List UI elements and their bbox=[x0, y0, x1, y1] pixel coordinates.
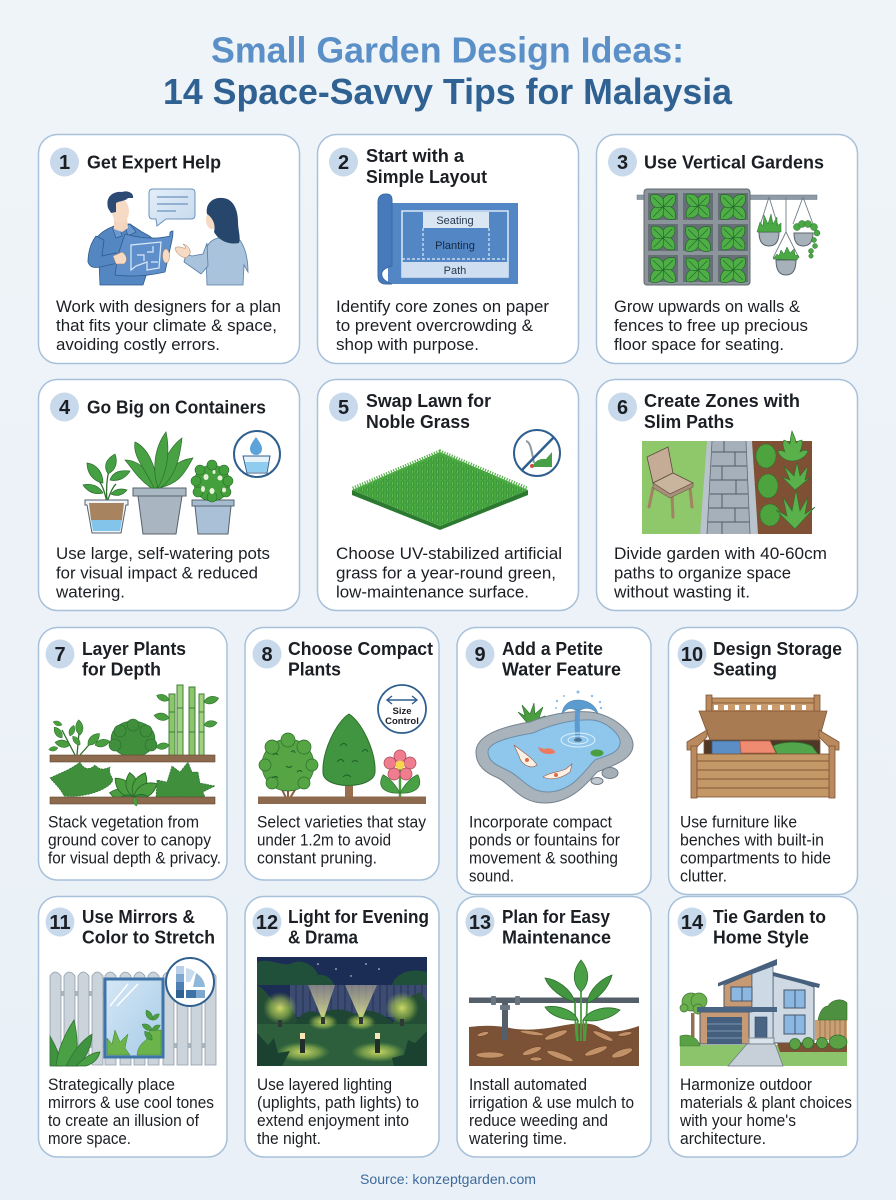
panel: tip 5 artificial grass bbox=[318, 380, 578, 610]
body text 11: Strategically place bbox=[48, 1076, 175, 1094]
body text 2: shop with purpose. bbox=[336, 336, 479, 354]
panel: tip 8 compact plants bbox=[245, 628, 439, 880]
heading 7: Layer Plants bbox=[82, 639, 186, 659]
body text 12: the night. bbox=[257, 1130, 321, 1148]
number badge 6: 6 bbox=[617, 397, 628, 419]
number badge 12 bbox=[252, 908, 282, 936]
body text 7 bbox=[48, 814, 221, 868]
illustration: rolled plan with zones: Path bbox=[444, 265, 466, 277]
body text 10: Use furniture like bbox=[680, 814, 797, 832]
illustration: artificial grass mat bbox=[352, 452, 528, 530]
heading 10: Seating bbox=[713, 660, 777, 680]
number badge 8: 8 bbox=[261, 644, 273, 666]
number badge 11 bbox=[46, 908, 74, 936]
source footer: Source: konzeptgarden.com bbox=[360, 1171, 536, 1187]
heading 14 bbox=[713, 907, 826, 948]
heading 2 bbox=[366, 146, 487, 187]
number badge 14: 14 bbox=[681, 912, 704, 934]
heading 4: Go Big on Containers bbox=[87, 398, 266, 418]
body text 14 bbox=[679, 1076, 852, 1148]
illustration: rolled plan with zones: Seating bbox=[436, 215, 474, 227]
heading 11 bbox=[82, 907, 215, 948]
body text 7: Stack vegetation from bbox=[48, 814, 199, 832]
heading 5: Noble Grass bbox=[366, 412, 470, 432]
panel: tip 14 home style bbox=[668, 896, 858, 1157]
body text 5 bbox=[336, 545, 562, 602]
heading 7: for Depth bbox=[82, 660, 161, 680]
body text 10: compartments to hide bbox=[680, 850, 831, 868]
panel: tip 11 mirrors and colour bbox=[38, 896, 227, 1157]
icon: no lawn mower bbox=[514, 430, 560, 476]
panel: tip 1 get expert help bbox=[38, 134, 300, 364]
number badge 7: 7 bbox=[54, 644, 66, 666]
body text 10: benches with built-in bbox=[680, 832, 824, 850]
icon: water-saving drop bbox=[234, 431, 280, 477]
illustration: rolled plan with zones bbox=[378, 194, 518, 284]
body text 11 bbox=[48, 1076, 214, 1148]
body text 9: movement & soothing bbox=[469, 850, 618, 868]
heading 3: Use Vertical Gardens bbox=[644, 152, 824, 172]
title: Small Garden Design Ideas: bbox=[211, 30, 684, 70]
body text 4: for visual impact & reduced bbox=[56, 564, 258, 582]
illustration: storage bench bbox=[687, 695, 839, 798]
body text 7: for visual depth & privacy. bbox=[48, 850, 221, 868]
body text 3: Grow upwards on walls & bbox=[614, 298, 800, 316]
body text 13: watering time. bbox=[468, 1130, 567, 1148]
icon: cool colour swatch bbox=[166, 958, 214, 1006]
illustration: layered plants on two tiers bbox=[48, 685, 220, 807]
panel: tip 4 containers bbox=[38, 380, 300, 610]
heading 11: Color to Stretch bbox=[82, 928, 215, 948]
panel: tip 7 layer plants bbox=[38, 628, 227, 880]
illustration: compact shrubs and flower bbox=[258, 685, 426, 804]
body text 5: grass for a year-round green, bbox=[336, 564, 556, 582]
number badge 14 bbox=[678, 908, 706, 936]
illustration: designer and client with blueprint bbox=[88, 189, 248, 285]
heading 6: Slim Paths bbox=[644, 412, 734, 432]
panel: tip 3 vertical gardens bbox=[596, 134, 858, 364]
heading 5 bbox=[366, 391, 491, 432]
heading 9: Water Feature bbox=[502, 660, 621, 680]
number badge 2: 2 bbox=[338, 152, 349, 174]
heading 2: Simple Layout bbox=[366, 167, 487, 187]
number badge 5 bbox=[329, 392, 358, 422]
heading 6 bbox=[644, 391, 800, 432]
heading 8: Plants bbox=[288, 660, 341, 680]
body text 1: avoiding costly errors. bbox=[56, 336, 220, 354]
heading 7 bbox=[82, 639, 186, 680]
illustration: koi pond with fountain bbox=[476, 690, 633, 803]
illustration: night garden lighting bbox=[257, 957, 427, 1066]
illustration: green wall and hanging pots bbox=[637, 189, 820, 286]
icon: size control: Size bbox=[392, 706, 412, 717]
heading 9: Add a Petite bbox=[502, 639, 603, 659]
body text 8: under 1.2m to avoid bbox=[257, 832, 391, 850]
panel: tip 6 zones and slim paths bbox=[596, 380, 858, 610]
body text 14: materials & plant choices bbox=[680, 1094, 852, 1112]
body text 10: clutter. bbox=[680, 868, 727, 886]
number badge 5: 5 bbox=[338, 397, 349, 419]
body text 11: mirrors & use cool tones bbox=[48, 1094, 214, 1112]
plant 1 leaves bbox=[83, 454, 130, 502]
body text 2: Identify core zones on paper bbox=[336, 298, 550, 316]
panel: tip 10 storage seating bbox=[668, 628, 858, 894]
body text 3: fences to free up precious bbox=[614, 317, 808, 335]
heading 6: Create Zones with bbox=[644, 391, 800, 411]
heading 9 bbox=[502, 639, 621, 680]
body text 13: reduce weeding and bbox=[469, 1112, 608, 1130]
body text 8: Select varieties that stay bbox=[257, 814, 427, 832]
heading 1: Get Expert Help bbox=[87, 152, 221, 172]
heading 14: Home Style bbox=[713, 928, 809, 948]
number badge 13 bbox=[466, 908, 494, 936]
heading 10: Design Storage bbox=[713, 639, 842, 659]
body text 9 bbox=[469, 814, 620, 886]
heading 12 bbox=[288, 907, 429, 948]
body text 12 bbox=[257, 1076, 419, 1148]
body text 6: Divide garden with 40-60cm bbox=[614, 545, 827, 563]
panel: tip 13 easy maintenance bbox=[457, 896, 651, 1157]
number badge 12: 12 bbox=[256, 912, 278, 934]
body text 11: to create an illusion of bbox=[48, 1112, 199, 1130]
body text 9: ponds or fountains for bbox=[469, 832, 620, 850]
body text 9: sound. bbox=[469, 868, 514, 886]
body text 12: extend enjoyment into bbox=[257, 1112, 409, 1130]
number badge 4 bbox=[50, 392, 79, 422]
body text 7: ground cover to canopy bbox=[48, 832, 212, 850]
body text 6: without wasting it. bbox=[613, 584, 750, 602]
body text 5: low-maintenance surface. bbox=[336, 584, 529, 602]
heading 11: Use Mirrors & bbox=[82, 907, 195, 927]
body text 14: Harmonize outdoor bbox=[680, 1076, 812, 1094]
illustration: drip irrigation and mulch bbox=[469, 960, 639, 1066]
heading 10 bbox=[713, 639, 842, 680]
illustration: fence with mirror and colour swatch bbox=[50, 958, 216, 1066]
body text 10 bbox=[680, 814, 831, 886]
number badge 8 bbox=[252, 640, 282, 668]
number badge 1 bbox=[50, 148, 79, 176]
body text 2: to prevent overcrowding & bbox=[336, 317, 533, 335]
number badge 11: 11 bbox=[49, 912, 71, 934]
icon: size control: Control bbox=[385, 716, 419, 727]
body text 13: irrigation & use mulch to bbox=[469, 1094, 634, 1112]
body text 3 bbox=[614, 298, 808, 354]
heading 8 bbox=[288, 639, 433, 680]
heading 2: Start with a bbox=[366, 146, 465, 166]
body text 8: constant pruning. bbox=[257, 850, 377, 868]
heading 12: Light for Evening bbox=[288, 907, 429, 927]
number badge 3 bbox=[608, 148, 637, 176]
body text 14: with your home's bbox=[679, 1112, 796, 1130]
body text 14: architecture. bbox=[680, 1130, 766, 1148]
number badge 10: 10 bbox=[681, 644, 703, 666]
body text 12: Use layered lighting bbox=[257, 1076, 392, 1094]
heading 13: Maintenance bbox=[502, 928, 611, 948]
number badge 13: 13 bbox=[469, 912, 491, 934]
body text 6: paths to organize space bbox=[614, 564, 791, 582]
body text 1: that fits your climate & space, bbox=[56, 317, 277, 335]
body text 1: Work with designers for a plan bbox=[56, 298, 281, 316]
body text 2 bbox=[336, 298, 550, 354]
plant 2 leaves bbox=[125, 432, 193, 488]
body text 9: Incorporate compact bbox=[469, 814, 612, 832]
body text 8 bbox=[257, 814, 427, 868]
body text 4: watering. bbox=[55, 584, 125, 602]
illustration: chair, paver path and planting bed bbox=[642, 431, 815, 534]
heading 13: Plan for Easy bbox=[502, 907, 610, 927]
icon: size control bbox=[378, 685, 426, 733]
heading 8: Choose Compact bbox=[288, 639, 433, 659]
number badge 4: 4 bbox=[59, 397, 71, 419]
plant 3 bush bbox=[191, 460, 233, 502]
body text 1 bbox=[56, 298, 281, 354]
heading 12: & Drama bbox=[288, 928, 359, 948]
title bbox=[163, 30, 733, 112]
illustration: three large pots and water icon bbox=[83, 431, 280, 534]
title: 14 Space-Savvy Tips for Malaysia bbox=[163, 71, 733, 112]
heading 13 bbox=[502, 907, 611, 948]
body text 12: (uplights, path lights) to bbox=[257, 1094, 419, 1112]
number badge 9 bbox=[466, 640, 494, 668]
panel: tip 2 simple layout bbox=[318, 134, 578, 364]
panel: tip 12 lighting bbox=[245, 896, 439, 1157]
body text 13 bbox=[468, 1076, 634, 1148]
heading 14: Tie Garden to bbox=[713, 907, 826, 927]
body text 6 bbox=[613, 545, 827, 602]
body text 13: Install automated bbox=[469, 1076, 587, 1094]
number badge 2 bbox=[329, 148, 358, 176]
number badge 3: 3 bbox=[617, 152, 628, 174]
body text 11: more space. bbox=[48, 1130, 131, 1148]
body text 3: floor space for seating. bbox=[614, 336, 784, 354]
body text 4 bbox=[55, 545, 270, 602]
number badge 9: 9 bbox=[474, 644, 486, 666]
number badge 7 bbox=[46, 640, 74, 668]
body text 4: Use large, self-watering pots bbox=[56, 545, 270, 563]
heading 5: Swap Lawn for bbox=[366, 391, 491, 411]
body text 5: Choose UV-stabilized artificial bbox=[336, 545, 562, 563]
illustration: rolled plan with zones: Planting bbox=[435, 240, 475, 252]
panel: tip 9 water feature bbox=[457, 628, 651, 894]
number badge 6 bbox=[608, 392, 637, 422]
illustration: modern house with garden bbox=[680, 959, 847, 1066]
number badge 10 bbox=[678, 640, 706, 668]
number badge 1: 1 bbox=[59, 152, 70, 174]
